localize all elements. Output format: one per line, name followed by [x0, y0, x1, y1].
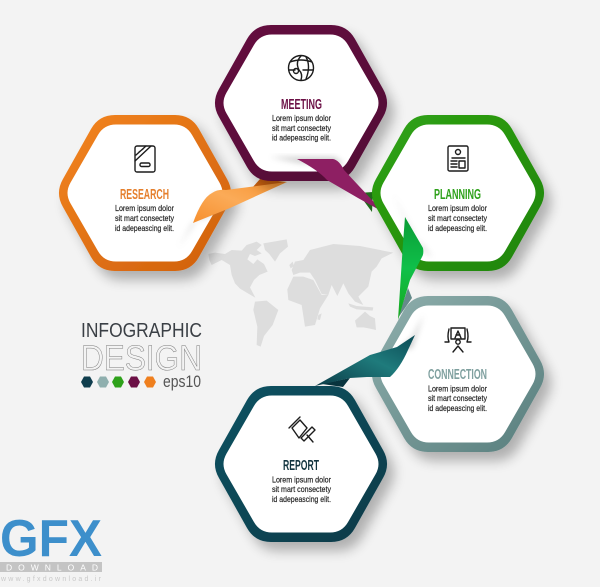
hexagon: report: [215, 386, 387, 542]
ribbon: green: [393, 193, 433, 320]
heading: planning: PLANNING: [434, 187, 481, 203]
title: infographic design: INFOGRAPHIC: [81, 320, 202, 342]
text: planning body: id adepeascing elit.: [428, 223, 487, 233]
heading: connection: CONNECTION: [428, 367, 487, 383]
ribbon: teal: [315, 314, 424, 387]
logo word: DOWNLOAD: [6, 562, 98, 572]
ribbon: magenta: [270, 157, 385, 213]
text: meeting body: Lorem ipsum dolor: [272, 113, 331, 123]
icon: pushpin: [289, 417, 315, 442]
heading: research: RESEARCH: [120, 187, 169, 203]
text: meeting body: id adepeascing elit.: [272, 132, 331, 142]
icon: document: [135, 146, 155, 172]
heading: report: REPORT: [283, 458, 319, 474]
icon: presenter: [445, 328, 471, 352]
logo: gfx download: GFX: [0, 510, 102, 568]
title: infographic design: [81, 320, 202, 378]
ribbon: orange: [178, 179, 287, 248]
text: report body: id adepeascing elit.: [272, 494, 331, 504]
colour swatches: [81, 376, 156, 388]
text: research body: Lorem ipsum dolor: [115, 203, 174, 213]
text: meeting body: sit mart consectety: [272, 123, 332, 133]
text: connection body: sit mart consectety: [428, 393, 488, 403]
text: planning body: sit mart consectety: [428, 213, 488, 223]
text: connection body: Lorem ipsum dolor: [428, 384, 487, 394]
hexagon: research: [59, 115, 231, 271]
hexagon: connection: [372, 296, 544, 452]
text: report body: Lorem ipsum dolor: [272, 474, 331, 484]
icon: profile document: [448, 146, 468, 171]
subtitle: design: DESIGN: [81, 339, 202, 378]
hexagon: planning: [372, 115, 544, 271]
text: connection body: id adepeascing elit.: [428, 403, 487, 413]
text: research body: sit mart consectety: [115, 213, 175, 223]
logo url: www.gfxdownload.ir: [0, 576, 102, 583]
heading: meeting: MEETING: [281, 97, 322, 113]
world map: [208, 239, 393, 347]
text: research body: id adepeascing elit.: [115, 223, 174, 233]
label: eps10: eps10: [163, 372, 201, 391]
icon: globe: [288, 56, 314, 80]
hexagon: meeting: [215, 25, 387, 181]
logo band: [0, 562, 102, 572]
text: planning body: Lorem ipsum dolor: [428, 203, 487, 213]
text: report body: sit mart consectety: [272, 484, 332, 494]
